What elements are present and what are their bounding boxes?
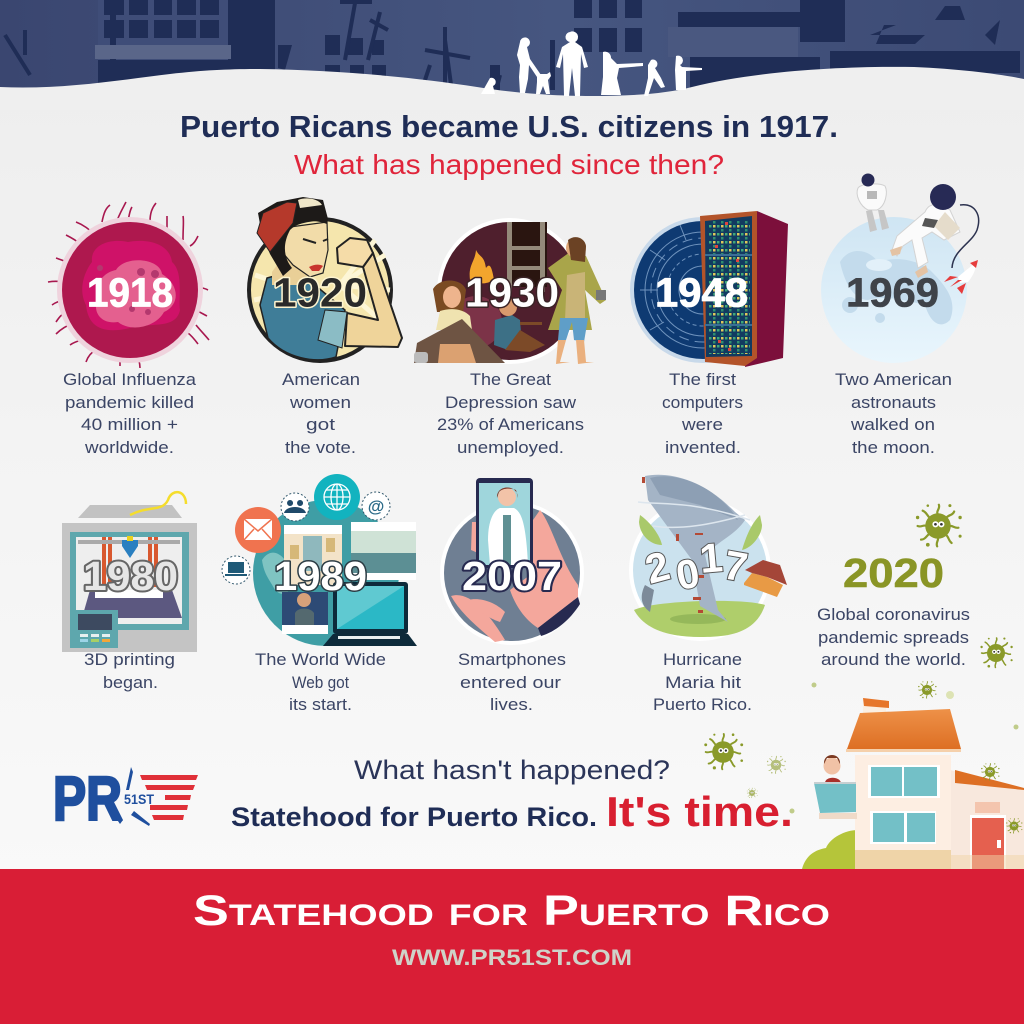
caption: got [306,415,335,434]
item: 1948 computers [630,211,788,457]
title: Puerto Ricans became U.S. citizens in 1917. [180,109,838,144]
caption: astronauts [851,393,936,412]
year label: 2020 [843,550,944,596]
caption: walked on [850,415,935,434]
caption [662,370,743,457]
caption: Global coronavirus [817,605,970,624]
caption: The first [669,370,736,389]
caption: invented. [665,438,741,457]
closing question: What hasn't happened? [354,755,670,785]
year label: 1920 [273,270,367,316]
footer url: WWW.PR51ST.COM [392,945,632,970]
item: 1930 great depression [414,218,606,457]
caption: began. [103,673,158,692]
icon: homeless family scene [414,218,606,364]
caption: lives. [490,695,533,714]
caption: The World Wide [255,650,386,669]
caption: Two American [835,370,952,389]
icon: 3D printer [62,492,197,652]
caption: worldwide. [84,438,174,457]
caption: women [289,393,351,412]
logo: PR51st [53,765,198,834]
item: 1980 3D printing [62,492,197,692]
caption: Web got [292,673,349,692]
caption [84,650,175,692]
caption: American [282,370,360,389]
item: 2020 coronavirus [817,504,1013,669]
caption: pandemic spreads [818,628,969,647]
house illustration with viruses [790,681,1024,869]
caption [817,605,970,669]
caption: 3D printing [84,650,175,669]
caption: Depression saw [445,393,577,412]
caption: Puerto Rico. [653,695,752,714]
caption: Smartphones [458,650,566,669]
year label: tilted digits: 2 [640,542,674,593]
icon: green virus [916,504,962,547]
balcony and man [824,758,840,774]
year label: 1948 [655,270,748,316]
item: 2007 smartphones [440,478,584,714]
caption: pandemic killed [65,393,194,412]
year label: tilted digits: 1 [698,534,725,582]
caption: computers [662,393,743,412]
caption [282,370,360,457]
small viruses [918,681,937,698]
year label: 1980 [83,553,178,599]
caption [437,370,584,457]
caption [835,370,952,457]
caption [653,650,752,714]
footer title: Statehood for Puerto Rico [193,887,830,935]
footer band [0,869,1024,1024]
caption [255,650,386,714]
call to action: It's time. [606,788,793,835]
icon: tornado and flying house [629,475,787,641]
icon: small green virus [980,638,1013,668]
logo: PR51st: PR [53,765,122,834]
top banner: ruined city [0,0,1024,100]
caption: its start. [289,695,352,714]
caption: 40 million + [81,415,178,434]
year label: tilted digits: 7 [720,542,751,591]
year label: 1989 [274,553,367,599]
icon: moon with astronauts and rocket [821,174,979,363]
year label: 1918 [87,270,173,316]
year label: 1969 [846,270,939,316]
icon: rosie the riveter [249,197,402,361]
caption: were [681,415,723,434]
item: 2017 hurricane maria [629,475,787,714]
icon: smartphone in hand [440,478,584,645]
logo: PR51st: 51ST [124,791,154,807]
icon: virus cell [48,202,209,368]
caption: 23% of Americans [437,415,584,434]
caption: Hurricane [663,650,742,669]
item: 1918 influenza [48,202,209,457]
caption [458,650,566,714]
year label: tilted digits: 0 [673,550,703,599]
caption: unemployed. [457,438,564,457]
year label: tilted digits [640,534,751,599]
main house [863,700,886,714]
year label: 1930 [465,270,559,316]
white wave edge of the banner [0,67,1024,110]
closing statement: Statehood for Puerto Rico. [231,802,597,832]
caption: The Great [470,370,551,389]
icon: computer cabinet and circuit dial [630,211,788,367]
year label: 2007 [462,553,562,599]
item: 1989 world wide web [222,474,417,714]
floating viruses near statement [704,733,786,798]
icon: globe with web cards and laptop: @ [368,497,384,516]
icon: globe with web cards and laptop [222,474,417,646]
subtitle: What has happened since then? [294,149,724,180]
side building [950,770,1024,869]
caption: the moon. [852,438,935,457]
caption [63,370,197,457]
bush [802,830,858,869]
caption: around the world. [821,650,966,669]
item: 1920 women vote [249,197,402,457]
item: 1969 moon landing [821,174,979,457]
caption: the vote. [285,438,356,457]
soldiers silhouette [481,31,702,96]
caption: Global Influenza [63,370,197,389]
caption: Maria hit [665,673,741,692]
caption: entered our [460,673,561,692]
